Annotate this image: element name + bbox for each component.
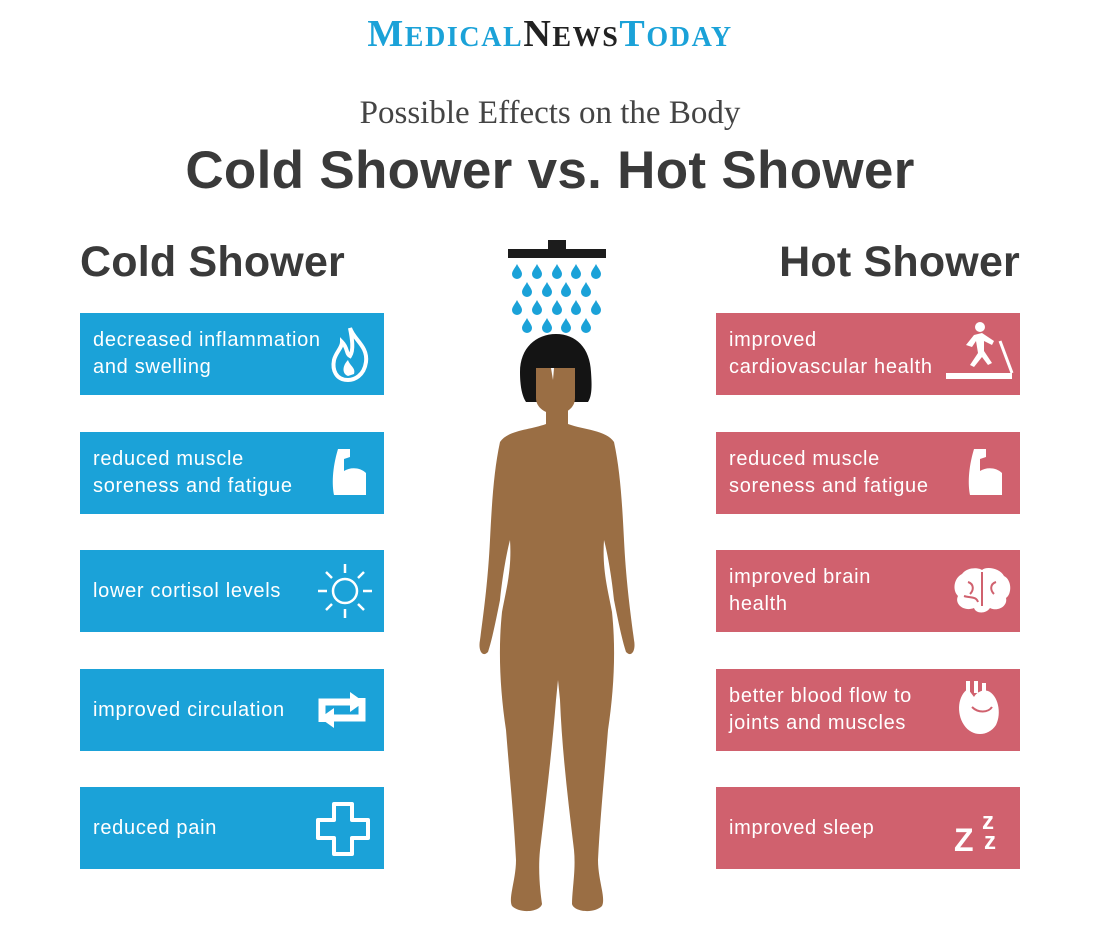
- panel: hot brain: [716, 550, 1020, 632]
- panel: cold inflammation: [80, 313, 384, 395]
- panel: hot muscle: reduced muscle: [729, 448, 880, 470]
- heading: cold: Cold Shower: [80, 238, 345, 286]
- panel: hot sleep: [716, 787, 1020, 869]
- panel: cold muscle: reduced muscle: [93, 448, 244, 470]
- panel: cold circulation: improved circulation: [93, 698, 285, 720]
- panel: cold cortisol: lower cortisol levels: [93, 580, 281, 602]
- panel: hot sleep: z: [982, 808, 995, 835]
- panel: hot muscle: [716, 432, 1020, 514]
- panel: hot cardio: [716, 313, 1020, 395]
- title: Cold Shower vs. Hot Shower: [185, 141, 915, 200]
- figure: woman silhouette: [479, 334, 635, 911]
- logo: MEDICALNEWSTODAY: [367, 13, 733, 55]
- panel: cold cortisol: [80, 550, 384, 632]
- panel: cold muscle: [80, 432, 384, 514]
- panel: cold muscle: soreness and fatigue: [93, 475, 293, 497]
- heading: hot: Hot Shower: [779, 238, 1020, 286]
- panel: cold circulation: [80, 669, 384, 751]
- panel: cold inflammation: and swelling: [93, 356, 211, 378]
- panel: hot blood flow: joints and muscles: [729, 712, 906, 734]
- panel: cold pain: reduced pain: [93, 816, 217, 838]
- panel: cold inflammation: decreased inflammation: [93, 329, 321, 351]
- panel: hot sleep: z: [984, 828, 997, 855]
- panel: hot muscle: soreness and fatigue: [729, 475, 929, 497]
- panel: hot sleep: Z: [954, 822, 974, 858]
- panel: hot brain: health: [729, 593, 788, 615]
- panel: hot sleep: improved sleep: [729, 816, 874, 838]
- icon: water drops: [512, 264, 601, 333]
- panel: hot blood flow: [716, 669, 1020, 751]
- panel: hot cardio: improved: [729, 329, 817, 351]
- icon: shower head: [508, 240, 606, 258]
- panel: hot blood flow: better blood flow to: [729, 685, 912, 707]
- panel: hot cardio: cardiovascular health: [729, 356, 933, 378]
- panel: hot brain: improved brain: [729, 566, 871, 588]
- panel: cold pain: [80, 787, 384, 869]
- subtitle: Possible Effects on the Body: [360, 95, 740, 131]
